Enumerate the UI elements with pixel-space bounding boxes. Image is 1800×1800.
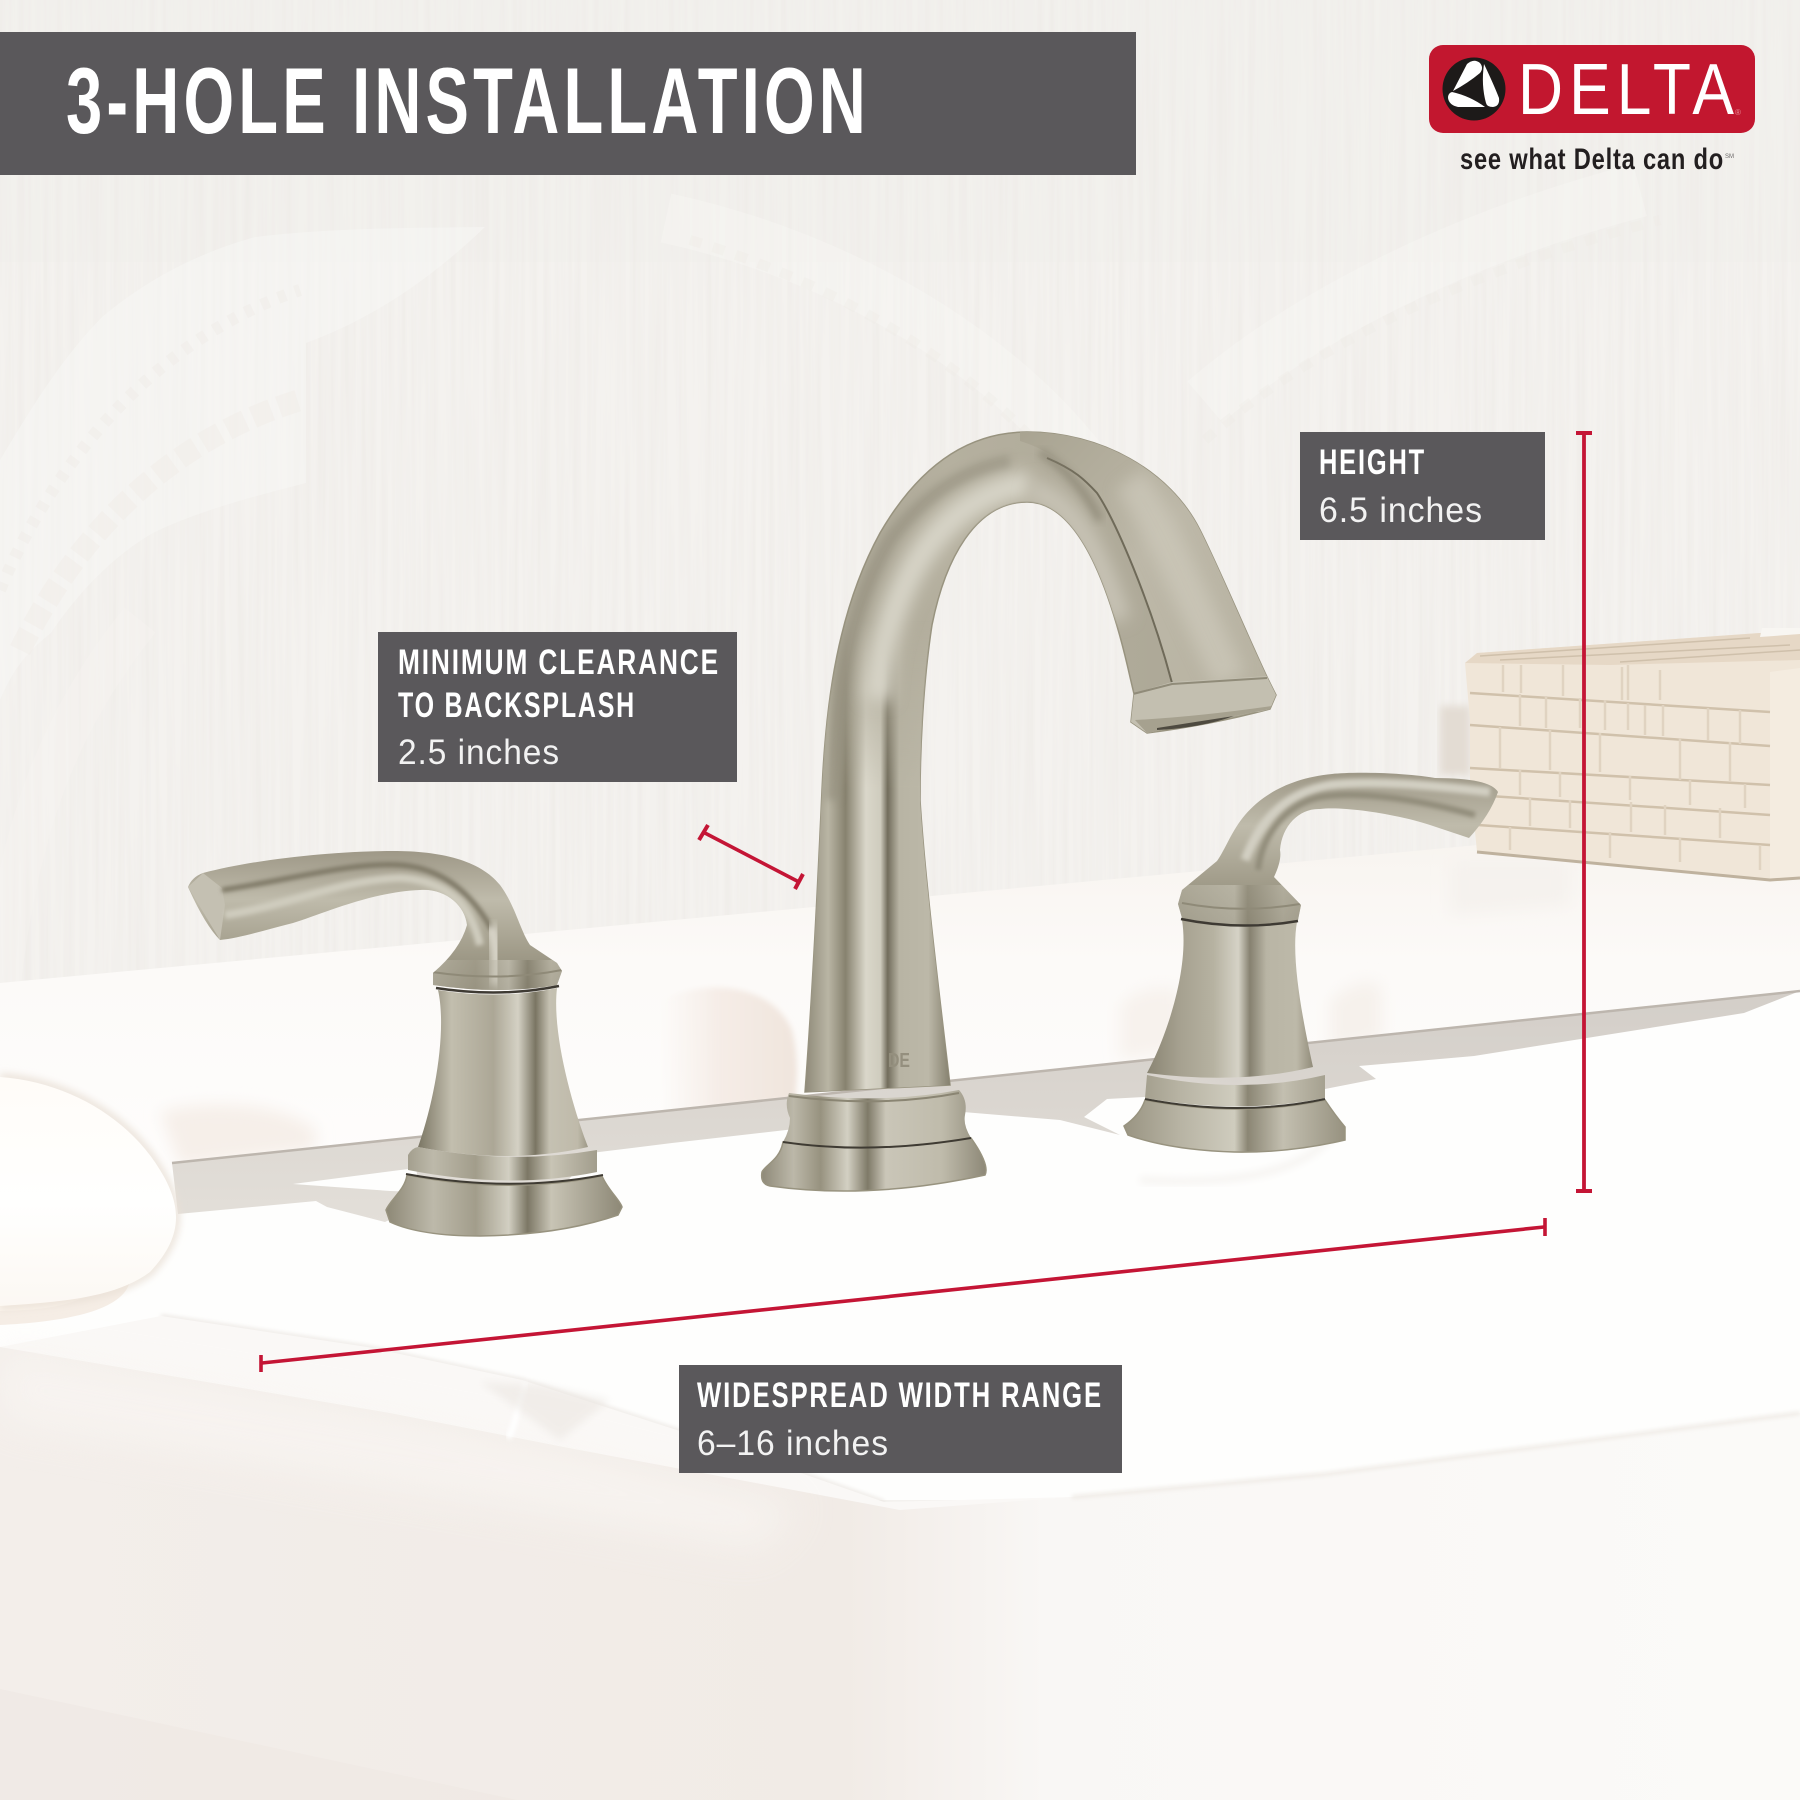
callout: widespread width: [679, 1365, 1122, 1473]
counter and sink: [0, 815, 1800, 1800]
clearance measure line: [699, 825, 803, 889]
callout: minimum clearance: MINIMUM CLEARANCE: [398, 643, 720, 682]
Delta logo: ®: [1735, 108, 1741, 117]
apron: [0, 1347, 1800, 1800]
basin front edge: [161, 1316, 884, 1502]
spout collar: [783, 1090, 971, 1148]
callout: widespread width: 6–16 inches: [697, 1424, 889, 1463]
logo mark: [1442, 58, 1506, 120]
basin surface: [0, 990, 1800, 1500]
soft shadows on shelf: [160, 860, 1570, 1166]
wall background: [0, 0, 1800, 1000]
left handle: [188, 851, 622, 1236]
wall lace pattern: [0, 190, 1660, 990]
width measure line: [261, 1218, 1545, 1372]
aerator opening: [1157, 716, 1234, 730]
callout: widespread width: WIDESPREAD WIDTH RANGE: [697, 1376, 1103, 1415]
logo tagline: see what Delta can do: [1460, 143, 1724, 176]
rim recess: [172, 991, 1800, 1222]
callout: height: 6.5 inches: [1319, 491, 1483, 530]
title text: 3-HOLE INSTALLATION: [66, 48, 870, 153]
imprint: DE: [888, 1050, 910, 1072]
logo wordmark: DELTA: [1518, 50, 1740, 130]
title banner: [0, 32, 1136, 175]
callout: minimum clearance: 2.5 inches: [398, 733, 560, 772]
right handle: [1124, 773, 1498, 1152]
spout base: [762, 1138, 986, 1191]
callout: height: [1300, 432, 1545, 540]
soap dish: [0, 1077, 176, 1325]
height measure line: [1576, 433, 1592, 1191]
logo tagline: SM: [1725, 154, 1734, 160]
callout: minimum clearance: TO BACKSPLASH: [398, 686, 636, 725]
basin highlight wedge: [293, 1168, 420, 1192]
stacked box on counter: [1440, 628, 1800, 880]
back shelf: [0, 815, 1800, 1172]
spout: [780, 425, 1290, 1100]
faucet: [188, 425, 1498, 1236]
callout: minimum clearance: [378, 632, 737, 782]
callout: height: HEIGHT: [1319, 443, 1426, 482]
Delta logo: [1429, 45, 1755, 133]
